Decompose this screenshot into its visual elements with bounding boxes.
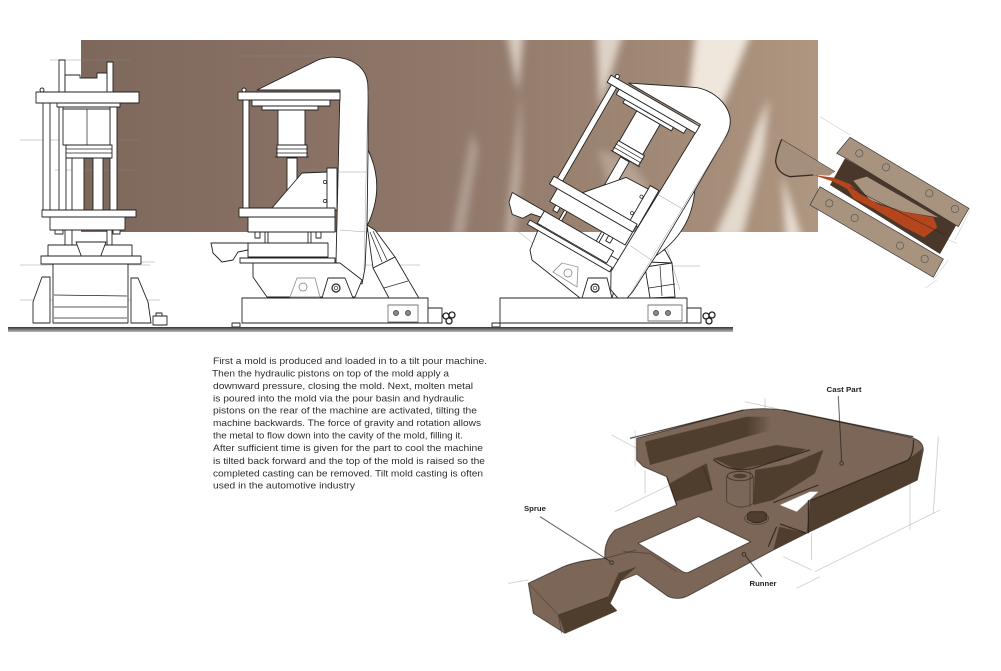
description text block: First a mold is produced and loaded in to a tilt pour machine. [213, 356, 487, 367]
tilted lower shell [530, 225, 622, 298]
description text block [212, 356, 487, 491]
leader lines [540, 396, 843, 577]
ground line [8, 327, 733, 332]
description text block: used in the automotive industry [213, 480, 355, 491]
machine 2: upright side view [211, 56, 455, 327]
tilted machine head [492, 32, 749, 311]
description text block: the metal to flow down into the cavity of the mold, filling it. [213, 430, 463, 441]
bolts [826, 150, 959, 263]
label: cast part: Cast Part [826, 385, 862, 394]
description text block: is tilted back forward and the top of the mold is raised so the [213, 456, 485, 467]
description text block: downward pressure, closing the mold. Next, molten metal [213, 381, 473, 392]
mold interior [830, 158, 957, 254]
description text block: completed casting can be removed. Tilt mold casting is often [213, 468, 483, 479]
machine 1: front view [20, 60, 167, 325]
mold cross-section with molten metal [773, 117, 970, 288]
description text block: pistons on the rear of the machine are activated, tilting the [213, 406, 477, 417]
pour basin [775, 139, 835, 177]
lower mold block [810, 187, 943, 277]
post [727, 477, 753, 507]
molten metal [813, 175, 937, 237]
upper mold block [837, 137, 969, 227]
machine 3: tilted side view [492, 32, 749, 327]
boss [745, 512, 769, 524]
description text block: is poured into the mold via the pour basin and hydraulic [213, 393, 464, 404]
wall shadow [645, 417, 772, 465]
window cut-outs [638, 517, 751, 573]
description text block: machine backwards. The force of gravity and rotation allows [213, 418, 481, 429]
cast part sketch [508, 396, 940, 633]
label: runner: Runner [750, 579, 777, 588]
background panel with streaks [81, 30, 818, 238]
part body [528, 409, 923, 633]
label: sprue: Sprue [524, 504, 546, 513]
description text block: Then the hydraulic pistons on top of the mold apply a [212, 368, 450, 379]
description text block: After sufficient time is given for the part to cool the machine [213, 443, 483, 454]
pale pivot lug [553, 263, 578, 287]
